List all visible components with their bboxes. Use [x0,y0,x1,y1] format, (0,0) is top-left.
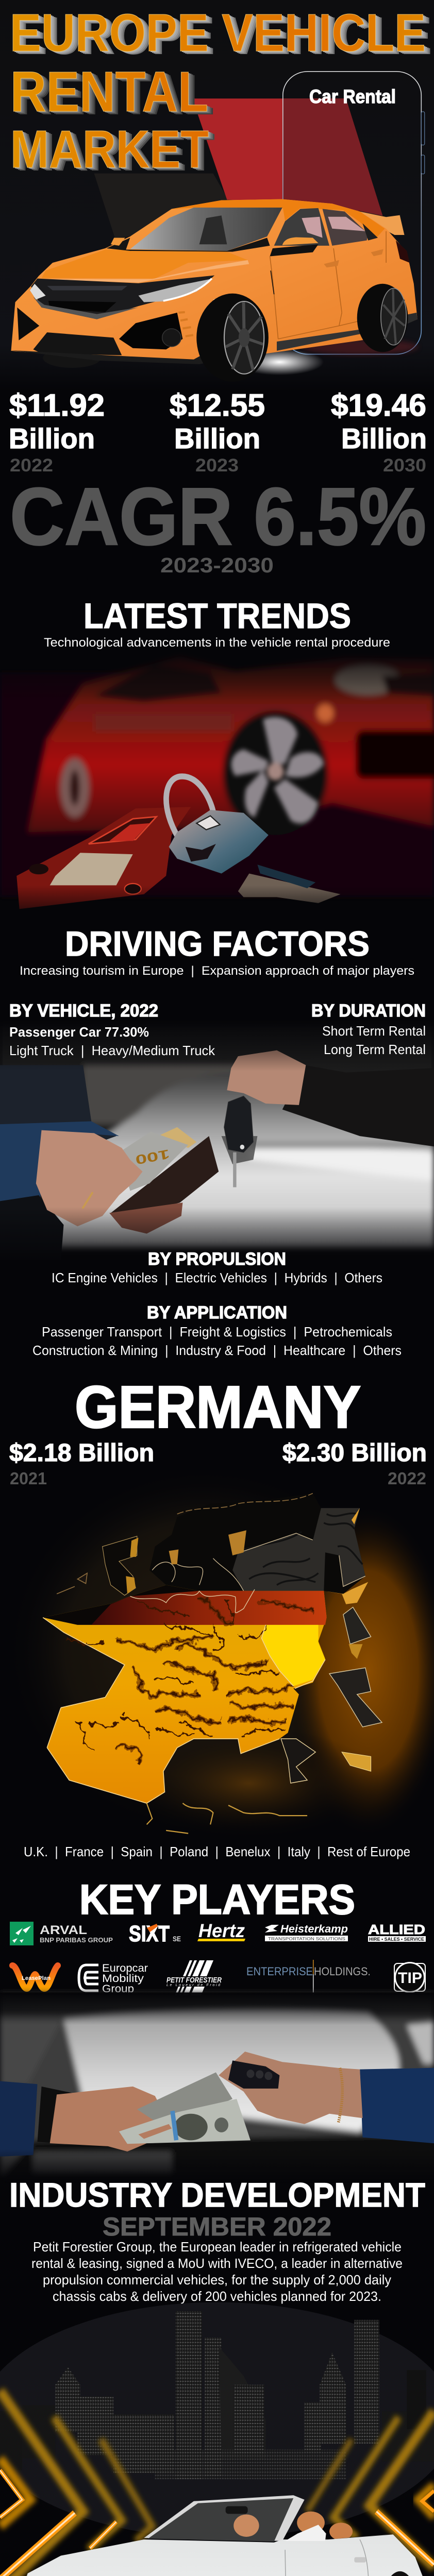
value 2030 [331,388,427,476]
logo: Europcar Mobility Group: Europcar [102,1962,148,1974]
tail lamp [396,241,410,263]
panel: hero [0,0,434,392]
neon chevrons right [307,2411,434,2567]
windshield glass [148,2498,293,2541]
phone side button upper [421,112,425,145]
scene fade top [0,1018,434,1071]
logo: Allied: ALLIED [368,1922,425,1937]
country list: U.K. | France | Spain | Poland | Benelux | Italy | Rest of Europe [24,1844,410,1859]
scene fade base [0,923,434,932]
map south shadow [116,1727,382,1839]
scene fade bottom [0,885,434,924]
headrest and door top [285,2524,326,2541]
side vent [271,270,274,294]
value 2021: 2021 [10,1469,47,1488]
wallet [111,1136,219,1216]
dark hood band [382,672,434,696]
title face: MARKET [10,120,209,179]
fog lamp [162,329,181,347]
grey lip [33,297,138,319]
coast outline [43,1618,325,1803]
value 2023: Billion [174,422,260,454]
relief cracks wide [113,1597,313,1762]
watch [37,2087,73,2143]
north dark land [149,1493,365,1594]
rear side window [323,209,368,246]
dark surround [0,672,434,897]
text: latest trends: Technological advancements in the vehicle rental procedure [44,636,390,650]
heading: driving factors: DRIVING FACTORS [65,924,370,963]
door lines [270,231,386,339]
front window reflection [302,217,323,238]
segment: by duration: BY DURATION [311,1001,426,1021]
side skirt [277,328,372,351]
door handle [354,2557,366,2563]
logo: TIP [394,1962,426,1993]
rear wheel [357,284,408,352]
grille slit [47,286,127,291]
metal teeth [238,865,341,903]
car hood background [0,1024,434,1251]
map: Europe in German flag colours [6,1467,434,1839]
heading: key players: KEY PLAYERS [79,1876,355,1923]
padlock [166,776,269,873]
car remote [228,2060,279,2089]
amber marker [317,704,333,722]
value 2023: 2023 [195,455,239,476]
value 2021 [9,1439,154,1488]
grey parallelogram [94,174,230,238]
illustration: city and white convertible [0,2302,434,2576]
logo: Allied: HIRE • SALES • SERVICE [369,1937,424,1942]
logo: Enterprise Holdings: HOLDINGS. [314,1965,371,1978]
silver car hood [0,1992,434,2179]
logo: Hertz: Hertz [198,1920,245,1941]
logo: Enterprise Holdings [246,1960,371,1995]
paragraph: propulsion commercial vehicles, for the supply of 2,000 daily [43,2272,391,2287]
segment: by propulsion [52,1249,382,1285]
value 2022 [9,388,105,476]
headlight right [138,279,213,302]
headlight [335,665,402,694]
scene fade bottom [0,2149,434,2182]
body highlight [94,714,232,732]
logo: Heisterkamp: TRANSPORTATION SOLUTIONS [268,1936,345,1941]
phone side button lower [421,155,425,174]
illustration: red and grey parallelograms with phone and car [11,72,425,382]
left headlight [18,2574,28,2576]
key fob [16,807,191,909]
title extrusion: RENTAL [16,63,214,127]
heading: latest trends: LATEST TRENDS [84,596,351,636]
lower grille slit [48,301,116,312]
illustration: handing car key for cash [0,1992,434,2182]
floor glow [235,349,324,375]
segment: by application: Construction & Mining | Industry & Food | Healthcare | Others [32,1343,402,1358]
logo: Petit Forestier: Le Loueur de Froid [166,1984,221,1987]
rear view mirror [226,2506,248,2514]
paragraph: rental & leasing, signed a MoU with IVECO, a leader in alternative [31,2256,403,2271]
scene fade bottom [0,1207,434,1266]
headlight white edge [163,279,212,301]
seats [233,2514,259,2537]
splitter [11,347,218,364]
panel: Germany values [9,1374,427,1488]
date: SEPTEMBER 2022 [103,2212,331,2241]
city haze [0,2302,434,2538]
logo: Sixt: SIXT [129,1921,170,1946]
wheel arch [223,711,328,835]
rear diffuser [371,313,418,339]
car body [28,656,434,832]
panel: driving factors text [9,924,426,1358]
logo: Enterprise Holdings: ENTERPRISE [246,1965,313,1978]
seats in cabin [199,215,227,244]
value 2030: 2030 [383,455,426,476]
door lines [285,2539,369,2576]
bright yellow region [261,1625,325,1686]
bracelet [338,2068,342,2123]
value 2022: $11.92 [9,388,105,422]
mirror right [282,238,319,245]
panel: market values [9,388,427,476]
logo: LeasePlan [12,1965,58,1989]
floor shadow tone [302,339,418,354]
segment: by vehicle: BY VEHICLE, 2022 [9,1001,158,1021]
headlight left [30,284,46,299]
segment: by duration: Long Term Rental [324,1042,426,1057]
value 2022: $2.30 Billion [282,1439,427,1467]
main flag land [43,1585,327,1803]
windshield frame [144,2495,305,2541]
rear wheel [383,2571,417,2576]
marker light [213,296,230,303]
paragraph: Petit Forestier Group, the European leader in refrigerated vehicle [33,2239,402,2255]
title face [10,3,426,179]
logo: Petit Forestier: PETIT FORESTIER [166,1976,222,1985]
left sleeve [0,1065,119,1260]
left corner grille [17,308,39,340]
map glow [6,1467,404,1834]
logo: Heisterkamp: Heisterkamp [280,1923,348,1935]
rear window reflection [328,217,365,231]
rear wheel [60,758,89,817]
right hand [227,1050,306,1105]
value 2021: $2.18 Billion [9,1439,154,1467]
car key [222,1096,257,1187]
illustration: red car with padlock key [0,643,434,932]
logo: Allied [368,1922,426,1942]
title face: RENTAL [10,60,208,124]
value 2022: 2022 [10,455,53,476]
banknotes [119,2072,251,2144]
rear seat far [329,2522,353,2540]
white convertible [15,2495,423,2576]
lower grille [33,332,122,355]
title [10,3,432,182]
black flag band [43,1585,199,1625]
title extrusion: MARKET [12,121,210,180]
spoiler [358,211,405,235]
segment: by duration [311,1001,426,1057]
left sleeve [0,2081,37,2157]
door handles [324,249,383,267]
hero backdrop [0,0,434,392]
blurred red car [0,656,434,897]
value 2030: Billion [341,422,427,454]
orange glow [285,1505,434,1836]
phone label: Car Rental [309,86,396,107]
panel: industry development text [9,2176,425,2304]
red flag band [91,1591,327,1625]
title extrusion: MARKET [13,121,212,180]
illustration: cash for car key exchange [0,1018,434,1266]
car body [15,2534,423,2576]
car body [11,199,418,361]
logo: Heisterkamp [265,1923,348,1941]
left hand [36,1130,143,1226]
neon chevrons left [0,2391,152,2576]
hood highlight [40,260,249,283]
alloy wheel [231,717,324,823]
logo: LeasePlan: LeasePlan [22,1975,51,1981]
segment: by propulsion: IC Engine Vehicles | Electric Vehicles | Hybrids | Others [52,1270,382,1285]
lower fingers [109,1202,182,1234]
panel: company logos [10,1920,426,1995]
banknotes: 100 [134,1146,171,1167]
title extrusion [11,4,432,182]
logo: Europcar Mobility Group: Group [102,1983,134,1995]
value 2030: $19.46 [331,388,426,422]
drivers list: Increasing tourism in Europe | Expansion approach of major players [20,964,414,978]
southern shores [147,1803,307,1834]
segment: by vehicle: Passenger Car 77.30% [9,1024,149,1040]
title extrusion: MARKET [15,122,213,181]
segment: by application: BY APPLICATION [147,1303,287,1323]
lower intake [119,313,182,349]
rear seat [297,2512,325,2534]
front side window [274,208,329,246]
scene fade top [0,643,434,702]
cabin dark rail [302,2534,393,2546]
ring [82,1192,93,1209]
CAGR period: 2023-2030 [160,553,274,577]
front upper black fascia [31,275,214,319]
logo: TIP: TIP [398,1970,422,1987]
heading: Germany: GERMANY [75,1374,361,1440]
windshield base [107,238,270,252]
roof [172,199,385,238]
logo: Sixt: SE [173,1935,181,1943]
front wheel [196,294,269,382]
scene fade top [0,1992,434,2025]
side fins [178,312,193,336]
value 2022: Billion [9,422,95,454]
far side wheel [43,348,101,368]
logo: Europcar Mobility Group: Mobility [102,1973,144,1985]
UK [57,1536,139,1596]
mirror left [111,238,125,246]
mirror stem [270,244,319,256]
value 2023 [170,388,265,476]
phone screen tint over parallelogram [283,98,383,218]
left hand [50,2087,172,2151]
segment: by duration: Short Term Rental [322,1023,426,1039]
skyline [0,2311,434,2479]
red parallelogram [192,98,383,218]
paragraph: chassis cabs & delivery of 200 vehicles planned for 2023. [53,2289,381,2304]
segment: by vehicle [9,1001,215,1058]
logo: Arval: BNP PARIBAS GROUP [40,1936,113,1944]
right sleeve [360,2068,434,2143]
phone frame [283,72,421,354]
logo: Europcar Mobility Group [79,1962,148,1995]
rear quarter glass [362,224,378,241]
logo: Arval [10,1922,113,1945]
paragraph [31,2239,403,2304]
title extrusion: MARKET [16,123,215,182]
segment: by application [32,1303,402,1358]
logo: Petit Forestier [166,1960,222,1995]
title extrusion: RENTAL [12,61,210,125]
segment: by vehicle: Light Truck | Heavy/Medium Truck [9,1043,215,1058]
value 2023: $12.55 [170,388,265,422]
banknotes [119,1127,196,1191]
logo: Arval: ARVAL [40,1923,87,1937]
hood shade [42,249,248,279]
segment: by application: Passenger Transport | Freight & Logistics | Petrochemicals [42,1324,392,1340]
relief cracks [66,1597,313,1762]
value 2022 [282,1439,427,1488]
window glass [94,664,222,702]
value 2022: 2022 [388,1469,426,1488]
right hand [219,2052,362,2124]
title extrusion: RENTAL [13,62,211,125]
air intake [356,730,434,779]
title extrusion: RENTAL [15,63,213,126]
phone [283,72,425,354]
east fragments [281,1582,382,1783]
windshield [130,208,282,251]
right sleeve [282,1065,434,1146]
segment: by propulsion: BY PROPULSION [148,1249,286,1269]
orange car [11,199,418,382]
